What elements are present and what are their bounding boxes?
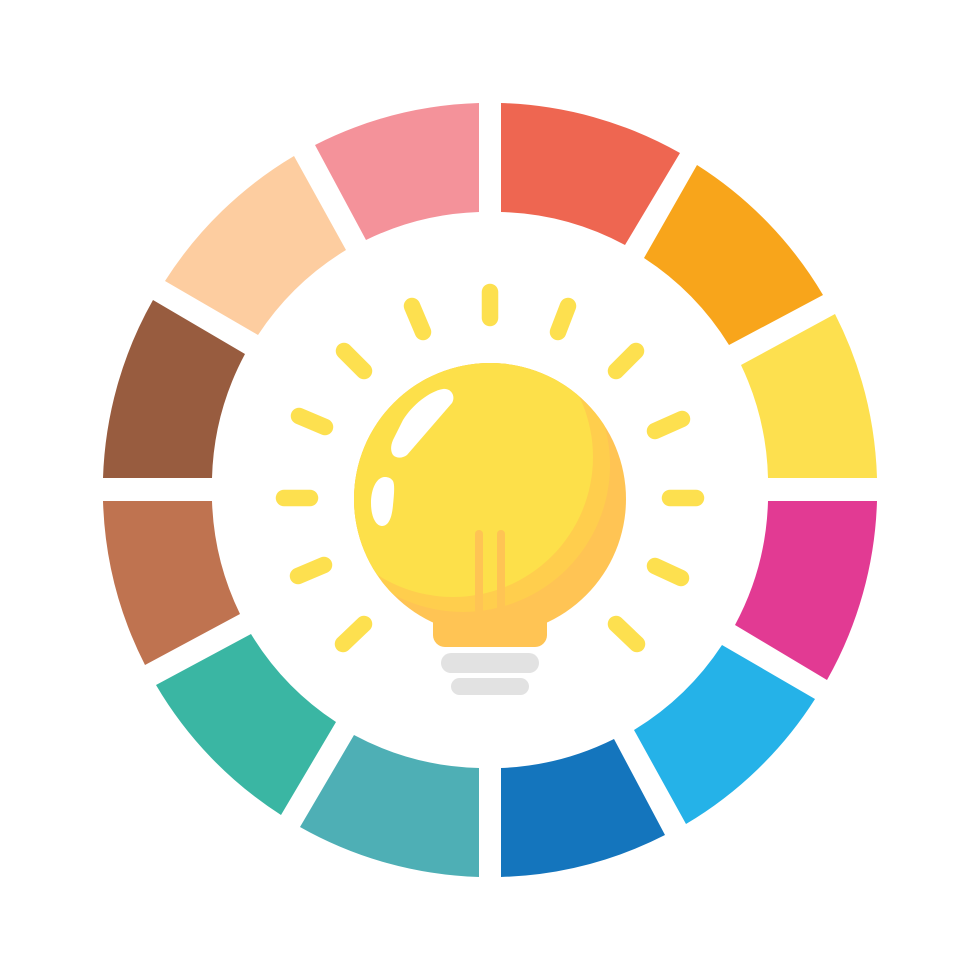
highlight: large: [391, 389, 453, 458]
segment: pink: [315, 103, 479, 240]
colour wheel ring: [103, 103, 877, 877]
segment: sky blue: [634, 645, 815, 824]
screw base: upper: [441, 653, 539, 673]
segment: peach: [165, 156, 346, 335]
infographic: colour wheel around a light bulb: [103, 103, 877, 877]
bulb neck: [433, 610, 547, 647]
icon: light rays: [284, 292, 696, 644]
highlight: small: [371, 477, 394, 526]
segment: orange: [644, 165, 823, 345]
segment: light brown: [103, 501, 240, 665]
segment: green: [156, 634, 336, 815]
filaments: [475, 530, 505, 614]
segment: dark brown: [103, 300, 245, 478]
segment: red: [501, 103, 680, 245]
segment: magenta: [735, 501, 877, 680]
screw base: lower: [451, 678, 529, 695]
segment: dark blue: [501, 739, 665, 877]
bulb globe: [354, 363, 626, 622]
icon: light bulb: [354, 363, 626, 695]
segment: yellow: [741, 314, 877, 478]
segment: light teal: [300, 735, 479, 877]
